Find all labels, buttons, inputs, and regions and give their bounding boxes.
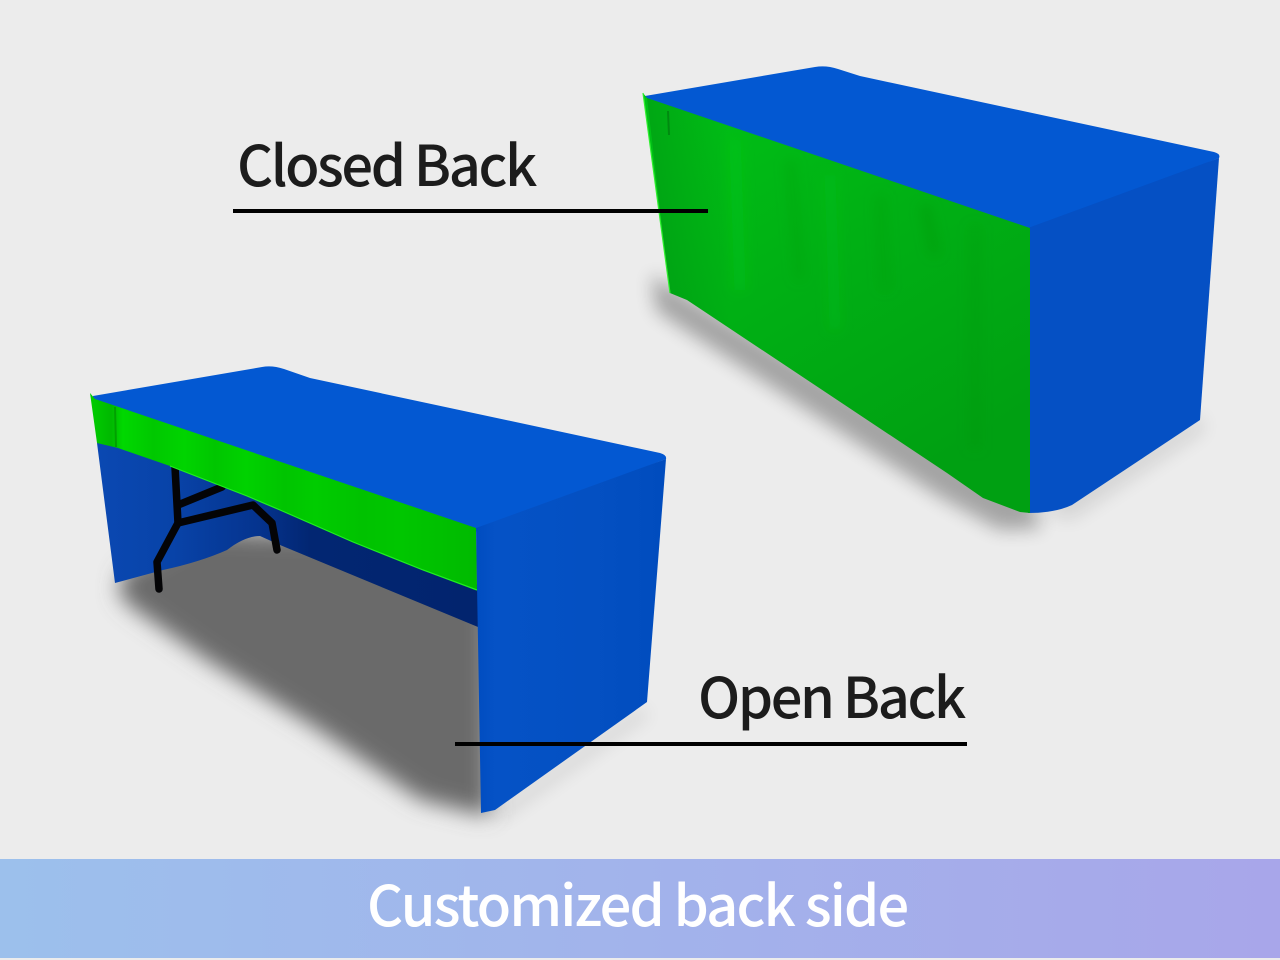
leader line: closed back <box>233 209 708 213</box>
closed table left shading <box>647 98 730 328</box>
open table back drape <box>97 440 478 627</box>
bottom banner <box>0 859 1280 958</box>
open table green banner <box>90 393 477 590</box>
label: open back: Open Back <box>698 654 964 735</box>
closed table bright edge <box>643 93 670 293</box>
open table banner bright edges <box>170 466 477 590</box>
leader line: open back <box>455 742 967 746</box>
closed table right side <box>1028 158 1219 513</box>
open table top <box>93 366 666 532</box>
table legs <box>157 467 277 589</box>
label: closed back: Closed Back <box>237 122 535 203</box>
open back table <box>90 366 666 820</box>
closed table top <box>645 66 1219 232</box>
closed table shadow <box>652 275 1042 530</box>
closed table fabric folds <box>735 140 975 450</box>
open table floor shadow <box>118 530 490 815</box>
closed table green back <box>643 93 1030 513</box>
closed back table <box>643 66 1219 530</box>
banner title: Customized back side <box>367 862 907 943</box>
open table banner seam <box>115 407 116 447</box>
closed table seam <box>668 111 669 135</box>
open table right side <box>476 459 666 813</box>
closed table right shadow <box>1040 415 1205 520</box>
open table side shadow <box>490 708 650 820</box>
